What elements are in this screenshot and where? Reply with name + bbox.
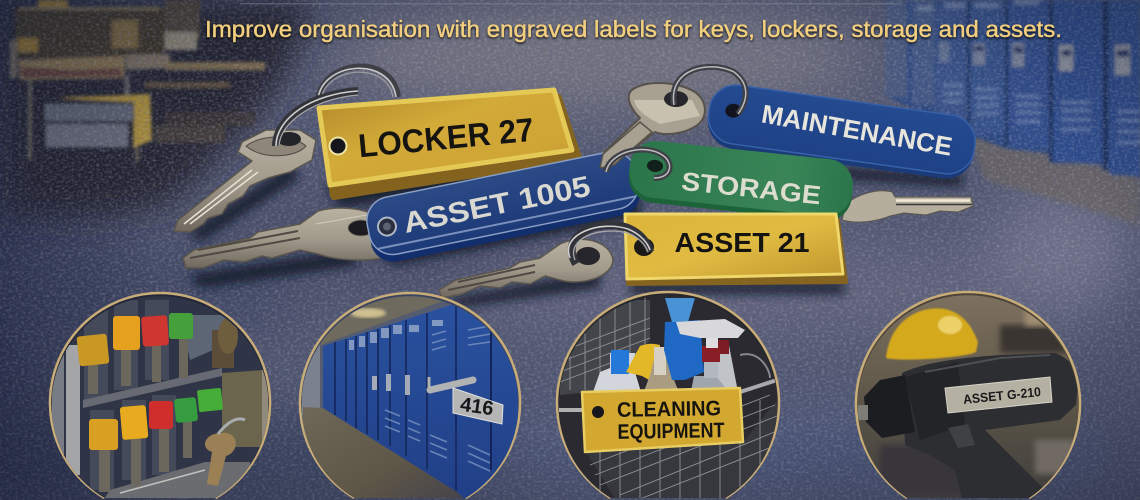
- rings: Locker 27: [276, 66, 398, 146]
- tag: Maintenance: [704, 82, 979, 182]
- photo circle: locker corridor: [300, 293, 520, 499]
- ring: Storage: [606, 150, 670, 178]
- key: behind Locker 27: [174, 130, 316, 232]
- label: Maintenance: MAINTENANCE: [759, 99, 955, 162]
- tag: Asset 1005: [363, 147, 644, 266]
- key tip over Asset 1005: [600, 122, 652, 168]
- photo circle: cleaning equipment: [557, 292, 779, 499]
- key: right of Storage: [842, 191, 973, 222]
- key: Asset 21: [439, 239, 613, 298]
- label: Locker 27: LOCKER 27: [357, 111, 535, 164]
- label: Asset 1005: ASSET 1005: [401, 171, 593, 240]
- drill body: [858, 353, 1078, 499]
- background: blurred workshop: [0, 0, 310, 218]
- brass tag: CLEANING: [617, 397, 721, 422]
- tag: Locker 27: [319, 90, 578, 196]
- brass tag: [582, 388, 743, 452]
- background: blurred lockers: [885, 0, 1140, 225]
- tag: Asset 21: [625, 214, 846, 284]
- label: Asset 21: ASSET 21: [674, 227, 810, 258]
- ring: Asset 21: [568, 225, 650, 264]
- photo circle: drill asset: [856, 292, 1080, 499]
- label: Storage: STORAGE: [680, 166, 822, 210]
- helmet: [886, 308, 978, 360]
- number plate: 416: [459, 394, 495, 420]
- key tags: [77, 313, 223, 450]
- subtitle: Improve organisation with engraved labels for keys, lockers, storage and assets.: [205, 16, 1062, 42]
- bottles: [593, 298, 745, 396]
- ring on tag: [559, 408, 582, 412]
- key: left of Asset 1005: [183, 208, 388, 268]
- asset label: ASSET G-210: [962, 384, 1042, 407]
- photo circle: key cabinet: [50, 293, 270, 499]
- tag: Storage: [626, 138, 856, 224]
- asset label: [945, 377, 1052, 413]
- key: top centre: [600, 83, 705, 168]
- tag shadows: [190, 158, 965, 307]
- number plate: [453, 388, 503, 424]
- ring: Maintenance: [673, 67, 746, 114]
- brass tag: EQUIPMENT: [617, 419, 725, 444]
- heading rule: [240, 3, 900, 4]
- locker handle: [430, 380, 473, 390]
